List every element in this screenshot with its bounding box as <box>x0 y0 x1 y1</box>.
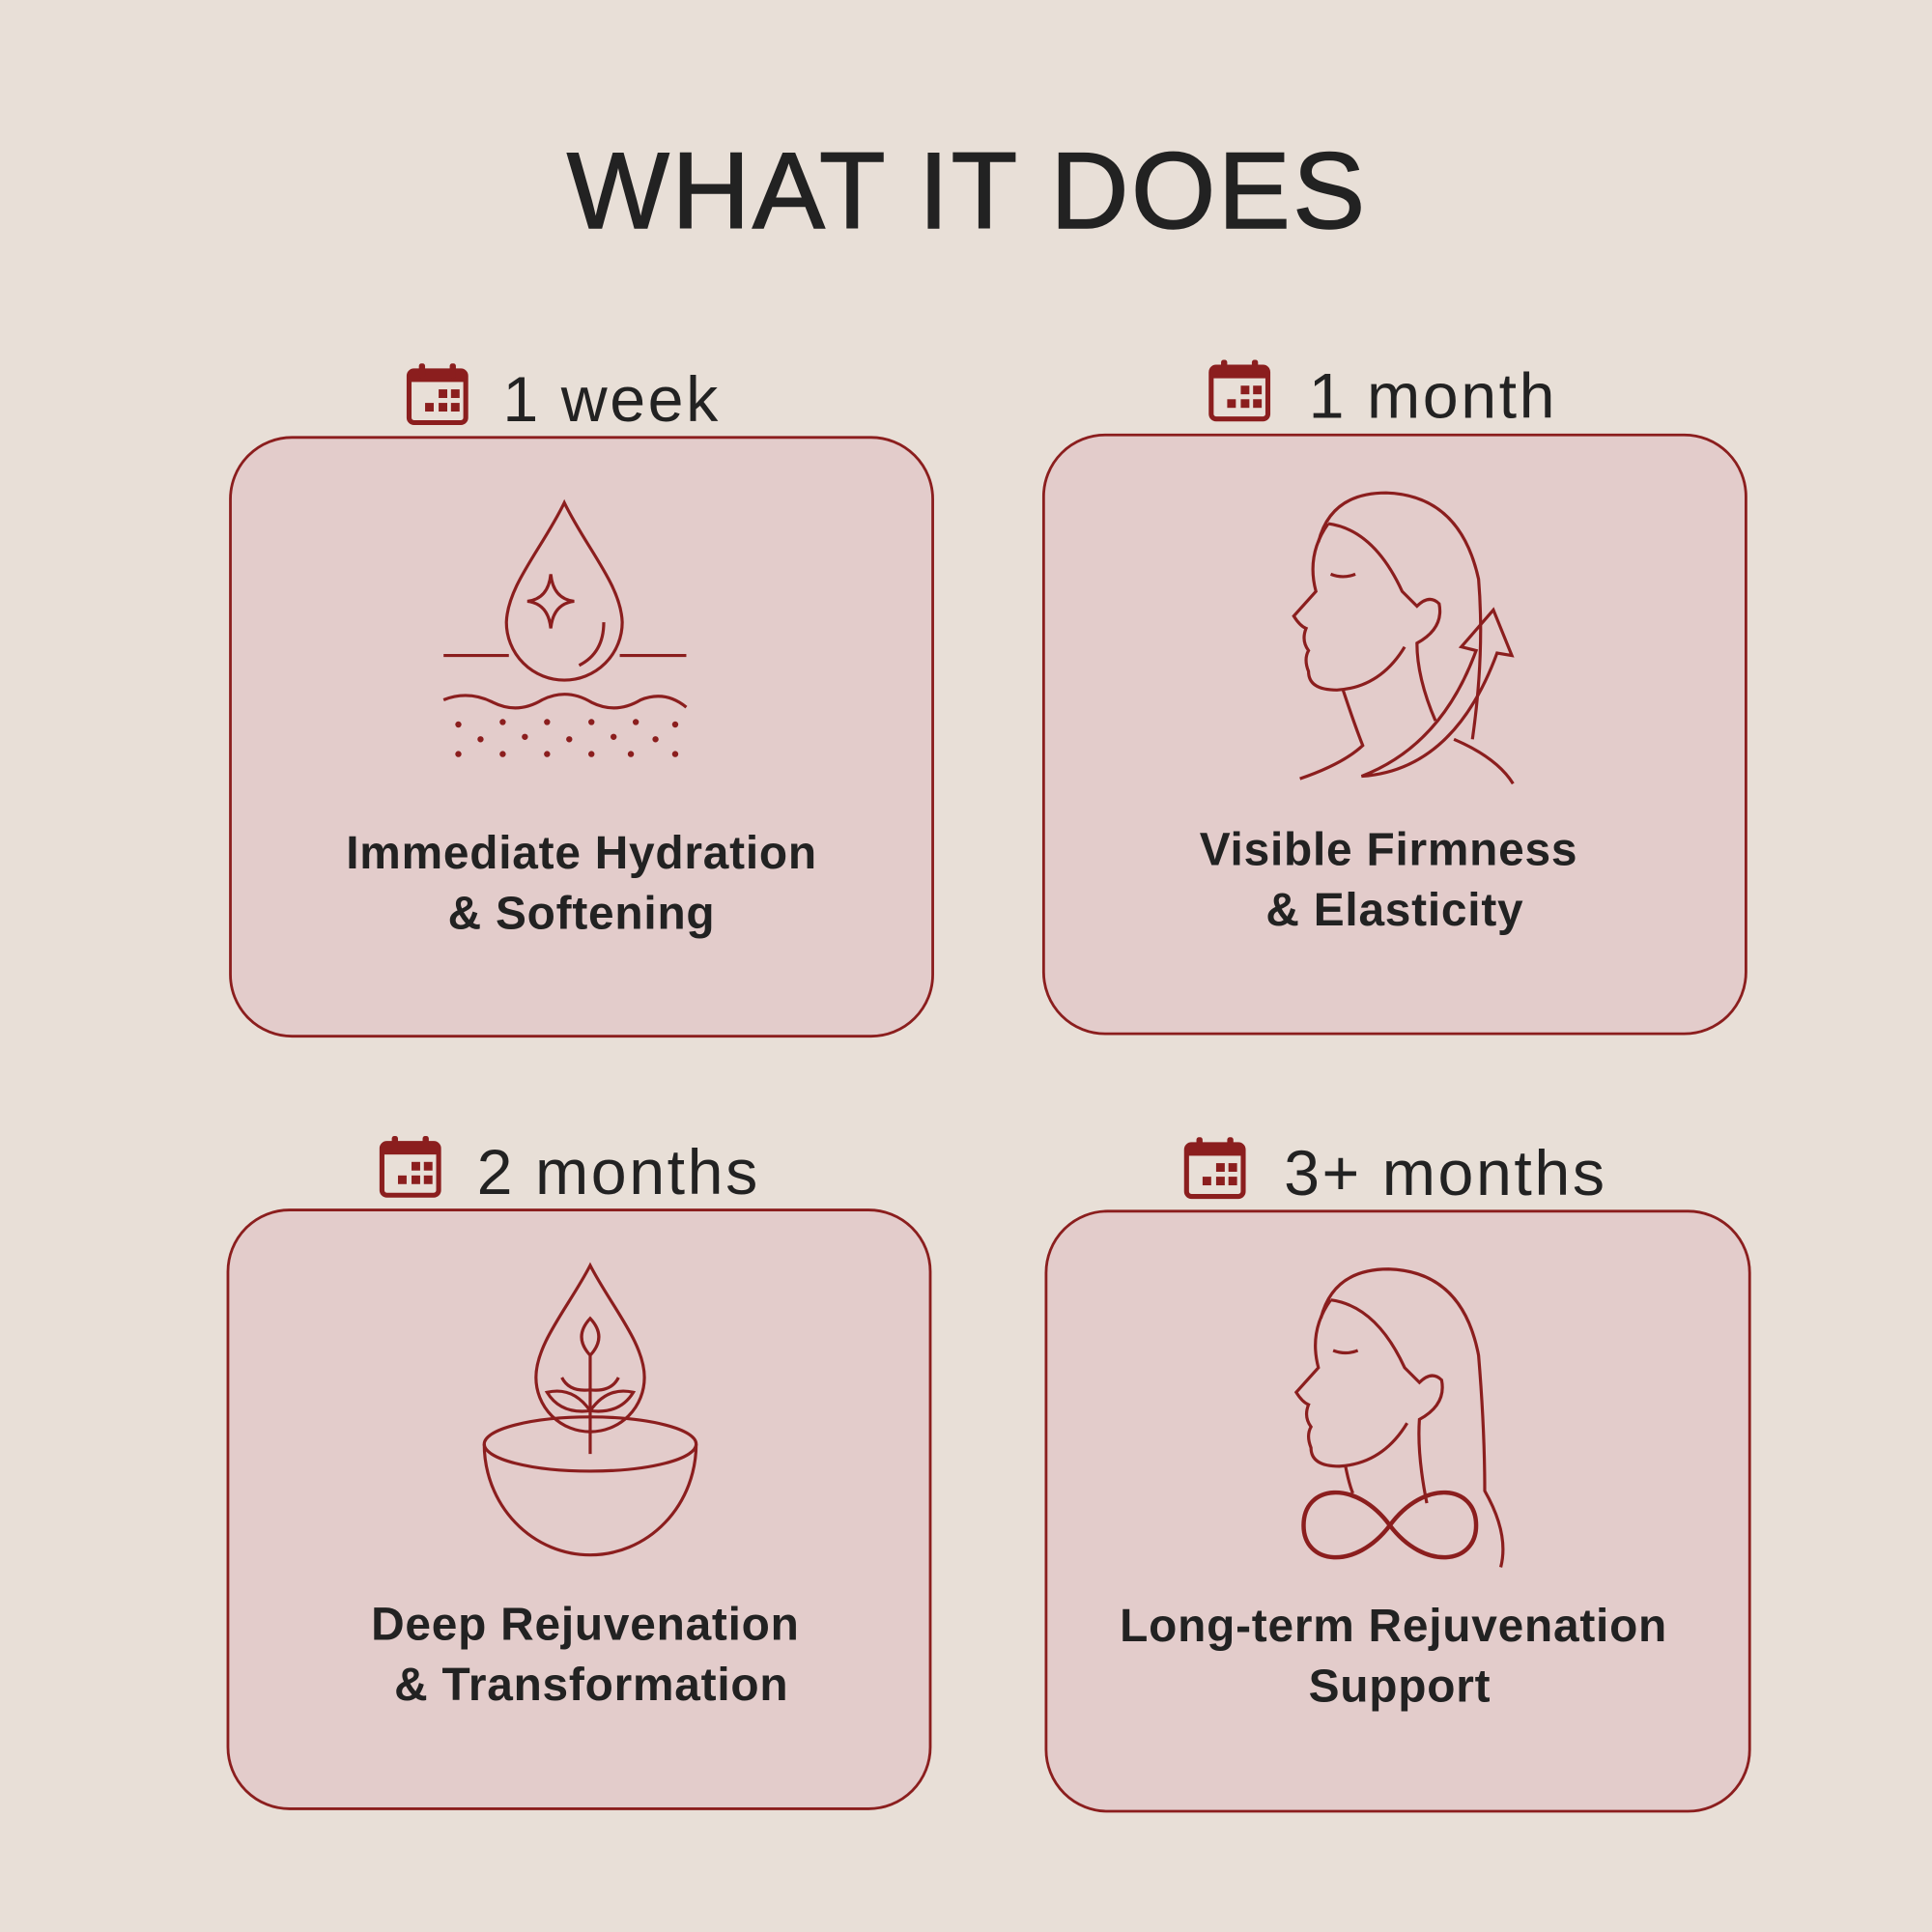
title: WHAT IT DOES <box>567 129 1368 251</box>
label: 2 months: 2 months <box>477 1137 760 1208</box>
panel: 2 months <box>228 1136 930 1808</box>
panel: 1 week <box>231 363 933 1037</box>
label: 1 week: 1 week <box>502 364 721 436</box>
panel: 3+ months <box>1046 1137 1749 1811</box>
card 4 <box>1046 1211 1749 1811</box>
text: Immediate Hydration: & Softening <box>448 889 715 940</box>
text: Long-term Rejuvenation: Long-term Rejuvenation <box>1120 1601 1667 1652</box>
text: Immediate Hydration: Immediate Hydration <box>346 828 817 879</box>
label: 3+ months: 3+ months <box>1284 1138 1607 1209</box>
text: Deep Rejuvenation: Deep Rejuvenation <box>371 1600 800 1651</box>
icon: face with upward arrow <box>1293 493 1513 783</box>
text: Deep Rejuvenation: & Transformation <box>394 1660 788 1711</box>
card 2 <box>1043 435 1746 1034</box>
text: Long-term Rejuvenation: Support <box>1309 1661 1491 1712</box>
panel: 1 month <box>1043 359 1746 1034</box>
text: Visible Firmness: & Elasticity <box>1265 885 1523 936</box>
label: 1 month: 1 month <box>1309 360 1557 432</box>
icon: face with infinity <box>1296 1269 1503 1567</box>
icon: drop with sprout over bowl <box>484 1265 696 1555</box>
label: 1 week <box>409 363 721 436</box>
icon: water drop on skin <box>443 502 686 708</box>
card 1 <box>231 438 933 1037</box>
text: Visible Firmness: Visible Firmness <box>1200 824 1577 875</box>
card 3 <box>228 1210 930 1808</box>
